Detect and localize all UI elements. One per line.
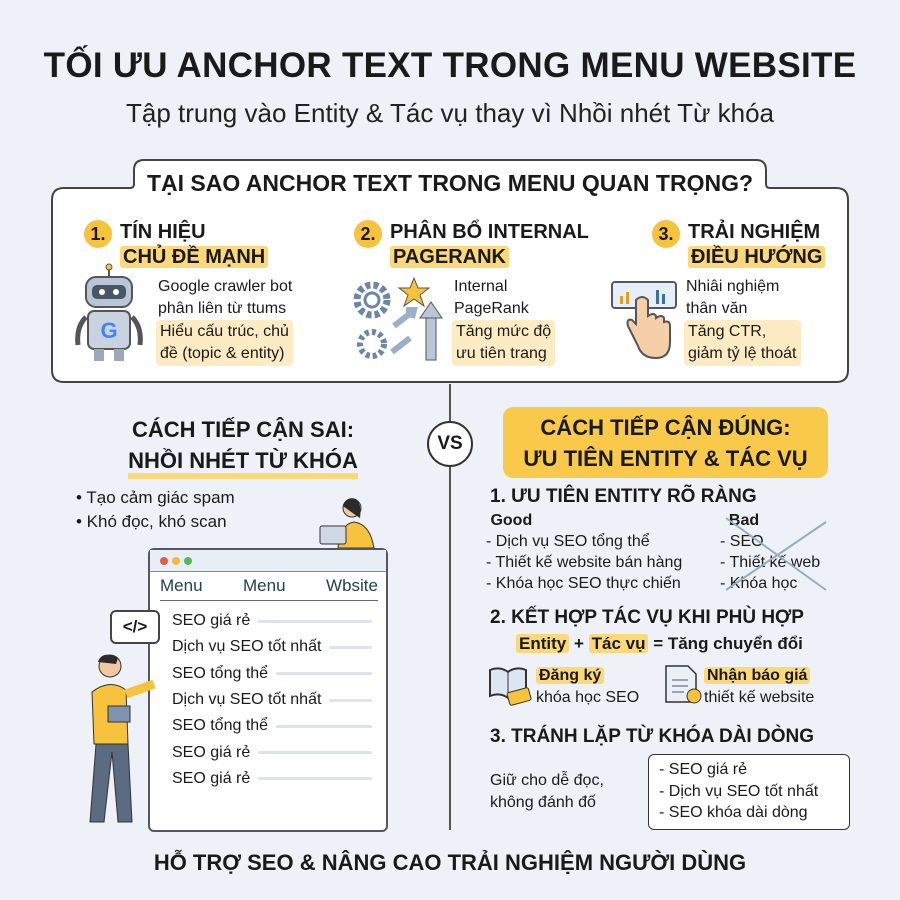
- icon: document check: [665, 665, 702, 704]
- icon: robot: G: [100, 318, 118, 343]
- item 2: [354, 220, 589, 366]
- item 3: Tăng CTR,: [688, 323, 766, 340]
- menu tabs: Wbsite: [326, 576, 378, 595]
- section 3: avoid long keywords: [490, 724, 850, 830]
- icon: woman with laptop: [320, 498, 374, 548]
- menu items: Dịch vụ SEO tốt nhất: [172, 638, 321, 655]
- right heading box: ƯU TIÊN ENTITY & TÁC VỤ: [523, 446, 808, 471]
- menu items: SEO giá rẻ: [172, 744, 250, 761]
- divider line: [449, 384, 451, 830]
- right heading box: CÁCH TIẾP CẬN ĐÚNG:: [540, 415, 791, 440]
- bad list crossed: [720, 512, 820, 592]
- item 2: PHÂN BỔ INTERNAL: [390, 221, 589, 243]
- bad list crossed: - SEO: [720, 533, 764, 550]
- icon: code bubble: </>: [123, 617, 147, 636]
- item 2: 2.: [360, 224, 376, 244]
- section 1: entity: [486, 484, 826, 592]
- bad list crossed: Bad: [729, 512, 759, 529]
- item 3: 3.: [658, 224, 674, 244]
- section 1: entity: 1. ƯU TIÊN ENTITY RÕ RÀNG: [490, 486, 757, 507]
- right heading box: [503, 407, 828, 478]
- item 2: Internal: [454, 278, 507, 295]
- VS circle: [427, 421, 473, 467]
- section 2: task: Đăng ký: [539, 667, 601, 684]
- icon: robot: [75, 264, 143, 361]
- left bullets: • Tạo cảm giác spam: [76, 488, 235, 507]
- panel: why important: [51, 159, 849, 383]
- section 3: avoid long keywords: không đánh đố: [490, 794, 596, 811]
- menu items: Dịch vụ SEO tốt nhất: [172, 691, 321, 708]
- menu items: SEO giá rẻ: [172, 770, 250, 787]
- example box: - Dịch vụ SEO tốt nhất: [659, 782, 818, 800]
- section 2: task: thiết kế website: [704, 689, 814, 706]
- section 2: task: [489, 606, 814, 706]
- item 3: Nhiâi nghiệm: [686, 278, 779, 295]
- section 2: task: khóa học SEO: [536, 689, 639, 706]
- left bullets: [76, 488, 235, 531]
- example box: - SEO giá rẻ: [659, 761, 747, 778]
- bad list crossed: - Thiết kế web: [720, 554, 820, 571]
- icon: gears and arrows: [354, 276, 443, 360]
- item 1: Google crawler bot: [158, 278, 292, 295]
- section 3: avoid long keywords: Giữ cho dễ đọc,: [490, 772, 604, 789]
- left heading: CÁCH TIẾP CẬN SAI:: [132, 417, 354, 442]
- item 1: đề (topic & entity): [160, 345, 284, 362]
- section 2: task: Entity + Tác vụ = Tăng chuyển đổi: [519, 634, 803, 653]
- good list: - Khóa học SEO thực chiến: [486, 575, 681, 592]
- icon: man presenting: [89, 654, 156, 822]
- item 3: [611, 220, 825, 366]
- item 2: PageRank: [454, 300, 529, 317]
- item 2: Tăng mức độ: [456, 323, 551, 340]
- icon: hand clicking: [611, 281, 677, 359]
- item 1: TÍN HIỆU: [120, 221, 206, 243]
- section 2: task: 2. KẾT HỢP TÁC VỤ KHI PHÙ HỢP: [490, 607, 804, 628]
- section 3: avoid long keywords: 3. TRÁNH LẶP TỪ KHÓA DÀI DÒNG: [490, 726, 814, 747]
- item 1: Hiểu cấu trúc, chủ: [160, 323, 289, 340]
- section 2: task: Nhận báo giá: [707, 667, 807, 684]
- item 1: 1.: [90, 224, 106, 244]
- menu items: SEO tổng thể: [172, 665, 268, 682]
- menu items: SEO tổng thể: [172, 717, 268, 734]
- menu items: SEO giá rẻ: [172, 612, 250, 629]
- good list: [486, 512, 682, 592]
- item 2: ưu tiên trang: [456, 345, 547, 362]
- menu tabs: [160, 576, 378, 601]
- item 1: CHỦ ĐỀ MẠNH: [123, 246, 265, 268]
- example box: [648, 754, 850, 830]
- left heading: NHỒI NHÉT TỪ KHÓA: [128, 448, 358, 473]
- left bullets: • Khó đọc, khó scan: [76, 512, 227, 531]
- icon: book: [489, 667, 532, 706]
- left heading: [128, 417, 358, 479]
- item 3: TRẢI NGHIỆM: [688, 221, 820, 243]
- example box: - SEO khóa dài dòng: [659, 804, 808, 821]
- item 3: giảm tỷ lệ thoát: [688, 345, 796, 362]
- menu tabs: Menu: [160, 576, 203, 595]
- good list: - Thiết kế website bán hàng: [486, 554, 682, 571]
- item 2: PAGERANK: [393, 246, 506, 268]
- subtitle: Tập trung vào Entity & Tác vụ thay vì Nhồi nhét Từ khóa: [126, 98, 774, 128]
- menu tabs: Menu: [243, 576, 286, 595]
- item 1: [75, 220, 293, 366]
- good list: - Dịch vụ SEO tổng thể: [486, 533, 650, 550]
- bad list crossed: - Khóa học: [720, 575, 797, 592]
- item 3: thân văn: [686, 300, 747, 317]
- item 3: ĐIỀU HƯỚNG: [691, 246, 822, 268]
- title: TỐI ƯU ANCHOR TEXT TRONG MENU WEBSITE: [44, 46, 856, 85]
- browser window with menu: [148, 548, 388, 832]
- VS circle: VS: [437, 433, 463, 454]
- panel heading: TẠI SAO ANCHOR TEXT TRONG MENU QUAN TRỌNG?: [147, 170, 753, 196]
- menu items: [172, 612, 372, 787]
- good list: Good: [490, 512, 532, 529]
- footer: HỖ TRỢ SEO & NÂNG CAO TRẢI NGHIỆM NGƯỜI DÙNG: [154, 850, 746, 875]
- icon: code bubble: [110, 610, 160, 644]
- item 1: phân liên từ ttums: [158, 300, 286, 317]
